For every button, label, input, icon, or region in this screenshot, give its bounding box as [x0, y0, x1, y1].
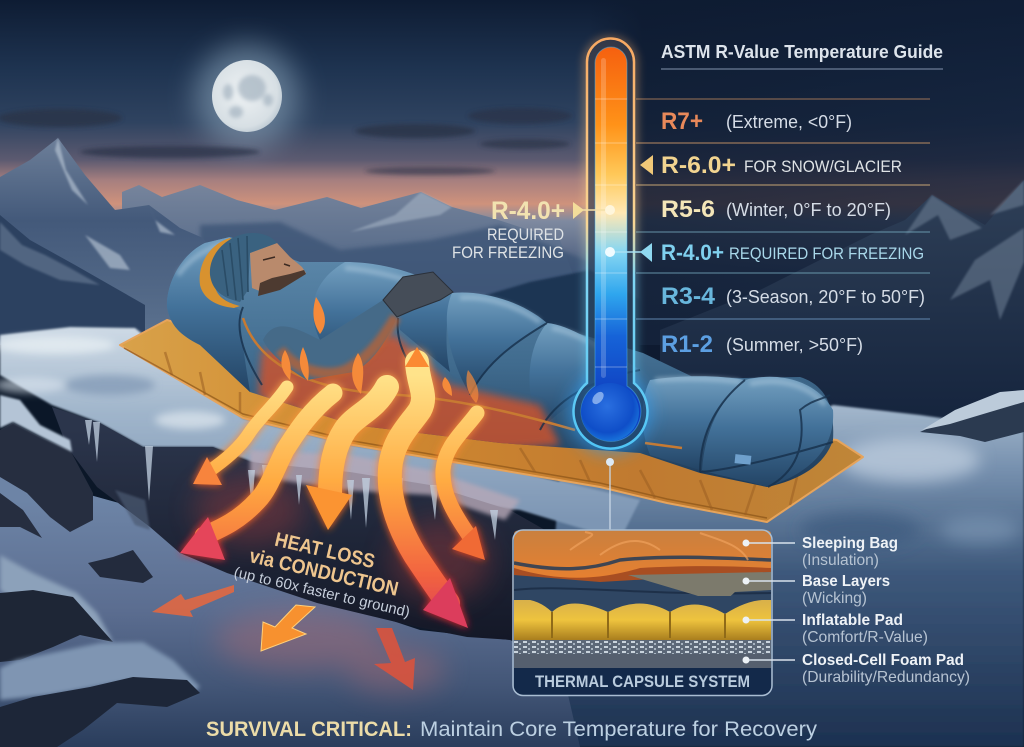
- dark hill behind bag: [470, 270, 640, 400]
- callout: sleeping bag: [742, 535, 898, 569]
- clouds: [0, 108, 572, 175]
- frost highlights: [178, 244, 825, 405]
- callout: inflatable pad: (Comfort/R-Value): [802, 629, 928, 646]
- pink glow on lower snow: [215, 610, 445, 692]
- sleeping pad: [120, 320, 863, 522]
- callout: sleeping bag: Sleeping Bag: [802, 535, 898, 552]
- left callout: R-4.0+ required for freezing: REQUIRED: [487, 225, 564, 244]
- right mountains: [590, 0, 1024, 430]
- moon: [195, 44, 299, 148]
- row: R5-6: [661, 196, 891, 223]
- footer: survival critical: Maintain Core Temperature for Recovery: [420, 718, 818, 741]
- note: 60x faster: (up to 60x faster to ground): [232, 564, 411, 621]
- left callout: R-4.0+ required for freezing: R-4.0+: [491, 197, 565, 225]
- distant mountains: [122, 185, 600, 345]
- row: R-6.0+ callout: [640, 152, 902, 179]
- gloves: [383, 272, 453, 317]
- connector: thermometer to capsule: [606, 458, 614, 530]
- bulb highlight: [590, 390, 606, 406]
- callout: sleeping bag: (Insulation): [802, 552, 879, 569]
- arrow 3: [306, 387, 387, 530]
- hood opening: [200, 238, 240, 308]
- scale ticks: [595, 99, 627, 367]
- left callout: R-4.0+ required for freezing: [452, 197, 615, 262]
- rocks: left cliff: [0, 395, 93, 538]
- callout: inflatable pad: [742, 612, 928, 646]
- row: R3-4: R3-4: [661, 283, 716, 310]
- thermometer: [568, 35, 652, 454]
- flames on bag: [281, 297, 478, 403]
- row: R-4.0+ callout: [605, 240, 924, 265]
- layer: inflatable pad: [514, 596, 771, 640]
- heading: heat loss: HEAT LOSS: [273, 529, 377, 573]
- callout: base layers: (Wicking): [802, 590, 867, 607]
- lower faded arrows: [152, 585, 415, 690]
- rock: right outcrop: [920, 390, 1024, 442]
- heat loss label: [232, 529, 411, 621]
- glass outline: [574, 39, 648, 449]
- stuff tag: [735, 454, 751, 465]
- zip line: [243, 318, 682, 448]
- baffle seams: [239, 307, 833, 487]
- cliff face: [52, 407, 545, 640]
- sleeping bag: [167, 237, 833, 487]
- row: R1-2: [661, 331, 863, 358]
- row: R-4.0+ callout: REQUIRED FOR FREEZING: [729, 244, 924, 263]
- snow ledge: left and centre: [0, 327, 640, 540]
- head with beanie: [210, 233, 306, 302]
- row: R7+: [661, 108, 852, 135]
- bag body: [167, 237, 833, 487]
- guide title: ASTM R-Value Temperature Guide: [661, 42, 943, 62]
- row: R5-6: R5-6: [661, 196, 715, 223]
- row: R-6.0+ callout: R-6.0+: [661, 152, 736, 179]
- body heat glow: [258, 335, 560, 450]
- frame: [513, 530, 772, 696]
- layer: sleeping bag: [514, 530, 771, 582]
- left mountains: [0, 138, 240, 345]
- snow field: right: [540, 405, 1024, 747]
- heading: via conduction: via CONDUCTION: [247, 545, 400, 601]
- snow field: lower: [0, 470, 580, 747]
- panel: thermal capsule system: THERMAL CAPSULE SYSTEM: [535, 672, 750, 691]
- row: R3-4: [661, 283, 925, 310]
- fluid: [581, 47, 641, 441]
- row: R3-4: (3-Season, 20°F to 50°F): [726, 287, 925, 307]
- callout: closed-cell foam pad: Closed-Cell Foam Pad: [802, 652, 964, 669]
- glow: [582, 35, 639, 410]
- footer: survival critical: SURVIVAL CRITICAL:: [206, 718, 412, 741]
- callout: closed-cell foam pad: [742, 652, 970, 686]
- layer: closed-cell foam pad: [514, 640, 771, 655]
- callout: closed-cell foam pad: (Durability/Redundancy): [802, 669, 970, 686]
- row: R1-2: (Summer, >50°F): [726, 335, 863, 355]
- background: night sky: [0, 0, 1024, 345]
- row: R1-2: R1-2: [661, 331, 713, 358]
- label strip: [514, 668, 771, 695]
- callout: base layers: [742, 573, 890, 607]
- arrow 2: [180, 393, 333, 560]
- row: R7+: (Extreme, <0°F): [726, 112, 852, 132]
- arrow 4: [390, 347, 468, 628]
- panel: thermal capsule system: [513, 530, 772, 696]
- guide rules: [636, 69, 943, 319]
- row: R5-6: (Winter, 0°F to 20°F): [726, 200, 891, 220]
- left callout: R-4.0+ required for freezing: FOR FREEZING: [452, 243, 564, 262]
- bulb core: [581, 383, 639, 441]
- rocks: mid slope: [88, 550, 153, 583]
- rocks: lower left: [0, 555, 200, 747]
- heat loss arrows: [180, 347, 485, 628]
- arm: [263, 300, 397, 380]
- callout: inflatable pad: Inflatable Pad: [802, 612, 903, 629]
- puffs: [167, 237, 833, 487]
- footer: survival critical: [206, 718, 818, 741]
- row: R-6.0+ callout: FOR SNOW/GLACIER: [744, 157, 902, 176]
- row: R-4.0+ callout: R-4.0+: [661, 240, 724, 265]
- callout: base layers: Base Layers: [802, 573, 890, 590]
- arrow 1: [193, 387, 287, 485]
- layer: base layers: [514, 572, 771, 602]
- row: R7+: R7+: [661, 108, 703, 135]
- arrow 5: [443, 413, 485, 560]
